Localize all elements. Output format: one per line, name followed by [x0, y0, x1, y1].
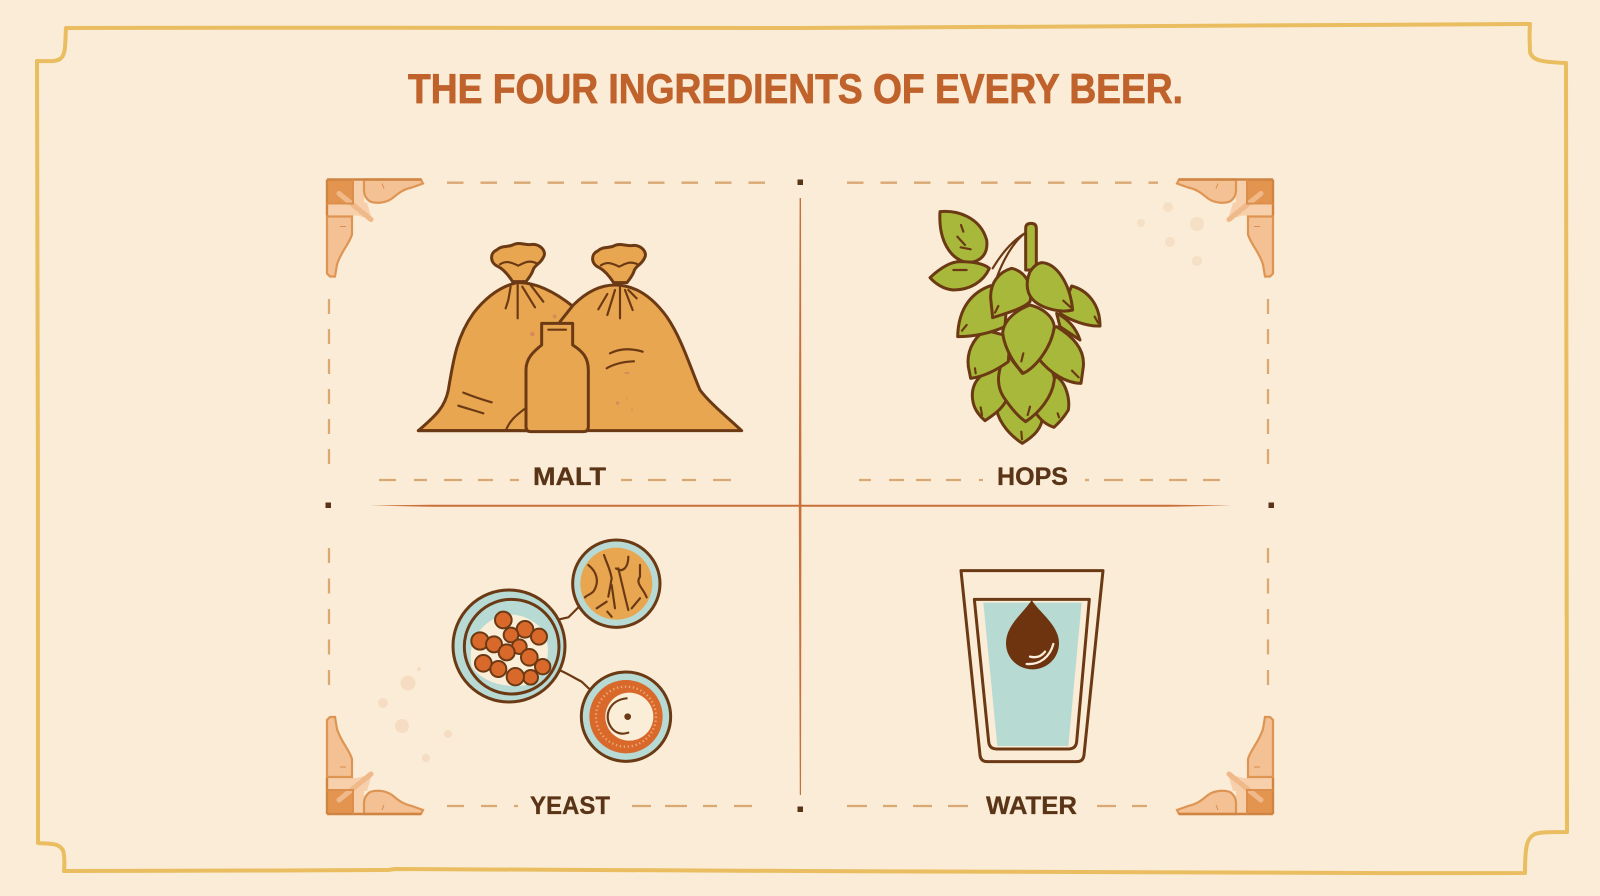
connector lines	[559, 607, 589, 689]
corner ornament: bottom right	[1177, 717, 1273, 814]
label dashes: hops	[859, 479, 1220, 481]
label dashes: water	[847, 805, 1147, 807]
label: water: WATER	[986, 792, 1077, 820]
label: malt: MALT	[533, 463, 606, 491]
icon: yeast under magnification	[453, 540, 671, 761]
dashed panel borders	[329, 183, 1268, 685]
corner ornament: top right	[1177, 180, 1273, 276]
corner ornament: bottom left	[327, 717, 423, 814]
corner ornament: top left	[327, 180, 423, 276]
splatter dots: top right	[1137, 202, 1204, 266]
panel: water	[847, 571, 1147, 820]
label: yeast: YEAST	[530, 792, 610, 820]
panel: hops	[859, 211, 1220, 491]
title: THE FOUR INGREDIENTS OF EVERY BEER.	[408, 65, 1183, 112]
label dashes: yeast	[447, 805, 752, 807]
panel: yeast	[447, 540, 752, 820]
icon: glass of water with drop	[961, 571, 1103, 762]
panel: malt	[379, 244, 742, 491]
label dashes: malt	[379, 479, 731, 481]
icon: hop cone with leaves	[930, 211, 1100, 443]
icon: malt sacks and bottle	[418, 244, 742, 432]
grid dividers and corner markers	[326, 180, 1274, 812]
label: hops: HOPS	[997, 463, 1068, 491]
splatter dots: bottom left	[378, 667, 452, 762]
